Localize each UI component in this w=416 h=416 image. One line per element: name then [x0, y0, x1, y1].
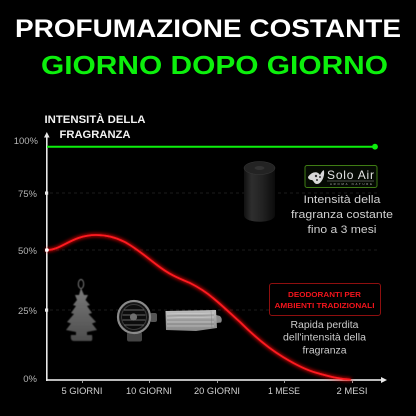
icon: textured sponge freshener — [166, 310, 222, 331]
y axis labels: 100% — [14, 136, 39, 147]
icon: diffuser cylinder — [244, 162, 275, 222]
logo: SoloAir — [305, 166, 377, 188]
chart axes — [44, 132, 387, 383]
title: GIORNO DOPO GIORNO — [41, 50, 388, 80]
text: constant fragrance caption: fragranza costante — [291, 209, 393, 221]
x axis labels: 2 MESI — [336, 386, 368, 397]
callout: traditional deodorisers — [270, 284, 380, 316]
y axis labels: 50% — [18, 246, 38, 257]
callout: traditional deodorisers: DEODORANTI PER — [288, 290, 362, 299]
text: rapid loss caption: fragranza — [302, 346, 347, 356]
y axis labels — [14, 136, 39, 385]
red declining intensity curve — [45, 235, 350, 380]
text: rapid loss caption: Rapida perdita — [290, 320, 359, 331]
x axis labels: 10 GIORNI — [126, 386, 172, 397]
icon: car vent freshener — [118, 301, 157, 342]
y axis labels: 25% — [18, 306, 38, 317]
text: constant fragrance caption: fino a 3 mesi — [308, 224, 376, 236]
axis title: INTENSITÀ DELLA — [44, 113, 146, 126]
text: rapid loss caption: dell'intensità della — [283, 332, 366, 344]
icon: logo mark — [308, 170, 324, 184]
axis title — [44, 113, 146, 141]
title: PROFUMAZIONE COSTANTE — [15, 15, 401, 43]
logo: SoloAir: AROMA NATURE — [330, 182, 372, 186]
x axis labels — [62, 386, 368, 397]
icon: tree air freshener — [66, 280, 97, 341]
logo: SoloAir: Solo Air — [327, 168, 374, 182]
green constant intensity line — [47, 144, 378, 150]
grid lines — [50, 193, 380, 310]
text: constant fragrance caption — [291, 194, 393, 236]
y axis labels: 0% — [23, 374, 38, 385]
title — [15, 15, 401, 80]
x axis labels: 20 GIORNI — [194, 386, 240, 397]
axis title: FRAGRANZA — [60, 129, 131, 141]
x axis labels: 5 GIORNI — [62, 386, 102, 397]
text: constant fragrance caption: Intensità della — [304, 194, 381, 206]
x axis labels: 1 MESE — [268, 386, 300, 397]
y axis labels: 75% — [18, 189, 38, 200]
text: rapid loss caption — [283, 320, 366, 356]
callout: traditional deodorisers: AMBIENTI TRADIZIONALI — [274, 301, 374, 310]
